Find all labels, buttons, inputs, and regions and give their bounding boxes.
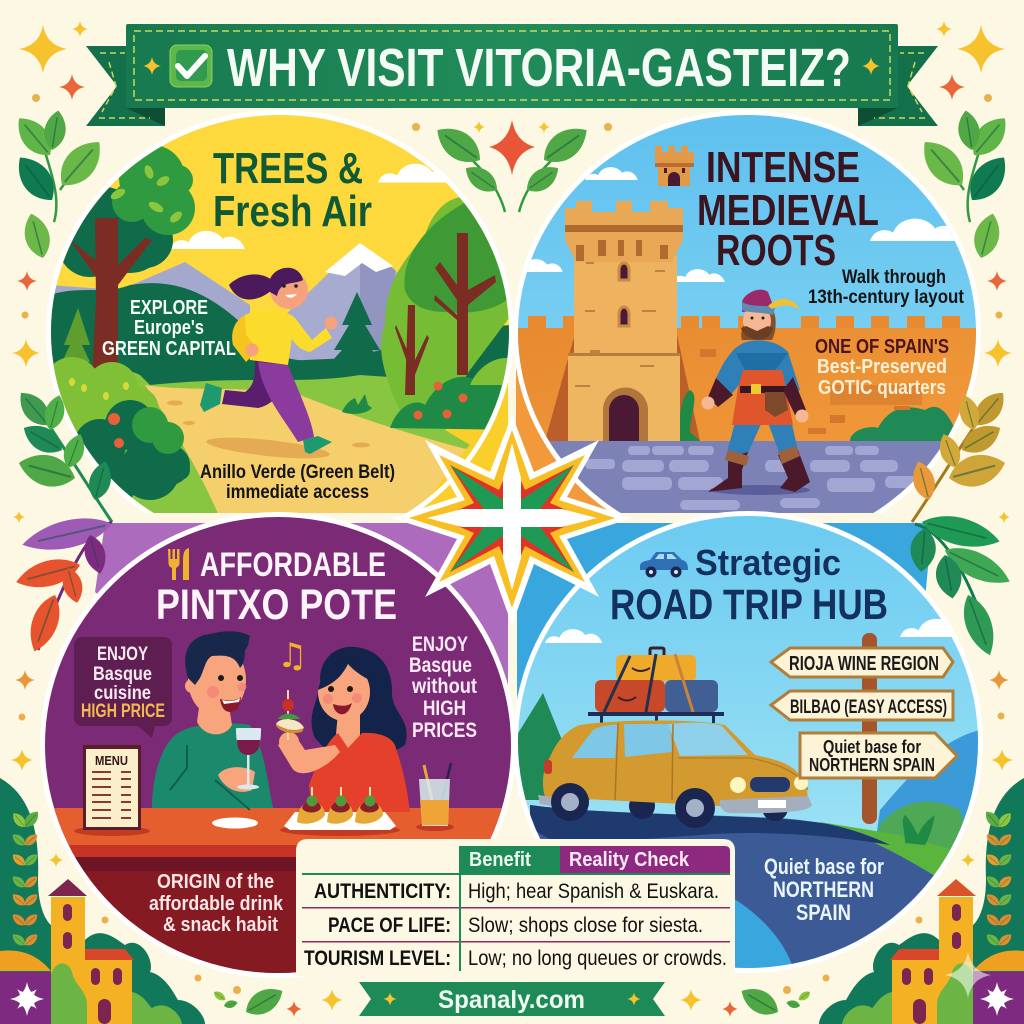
leaves: lower-right gold branch <box>909 386 1011 522</box>
text: origin of the habit <box>149 871 284 936</box>
ground <box>55 372 502 513</box>
table row: authenticity <box>314 880 719 903</box>
icon: fork and knife <box>168 548 189 580</box>
cobblestone street <box>549 441 941 513</box>
leaves: lower-left green branch <box>13 386 115 522</box>
table row: authenticity: AUTHENTICITY: <box>314 880 451 903</box>
comparison table <box>296 839 735 976</box>
text: explore Europe's green capital: GREEN CAPITAL <box>102 338 236 360</box>
castle tower <box>565 201 683 444</box>
menu card <box>74 745 150 836</box>
heading: affordable pintxo pote <box>156 546 397 629</box>
footer banner: Spanaly.com <box>359 982 665 1016</box>
text: best-preserved gothic quarters: GOTIC quarters <box>818 377 946 399</box>
pintxo plate <box>280 787 400 836</box>
footer banner: Spanaly.com: Spanaly.com <box>438 986 585 1014</box>
heading: strategic road trip hub: ROAD TRIP HUB <box>610 581 888 629</box>
text: Anillo Verde access: immediate access <box>226 482 369 503</box>
mountains <box>51 243 398 360</box>
icon: castle <box>655 146 694 186</box>
sign: Rioja wine region: RIOJA WINE REGION <box>789 653 939 675</box>
table row: authenticity: High; hear Spanish & Euskara. <box>468 880 719 903</box>
text: enjoy Basque without high prices: HIGH <box>423 697 466 720</box>
text: enjoy Basque without high prices: ENJOY <box>412 633 468 656</box>
leaves: centre-top branches <box>430 119 594 212</box>
text: explore Europe's green capital: EXPLORE <box>130 297 208 319</box>
title banner <box>86 24 938 126</box>
callout: high price <box>74 637 172 738</box>
corner wedge: yellow and orange behind upper panels <box>280 332 748 513</box>
woman with pintxo <box>276 647 410 812</box>
text: explore Europe's green capital <box>102 297 236 360</box>
heading: strategic road trip hub <box>610 542 888 629</box>
icon: music note: ♫ <box>277 636 307 676</box>
table row: tourism level: Low; no long queues or crowds. <box>468 947 727 970</box>
table row: pace of life: Slow; shops close for siesta. <box>468 914 703 937</box>
text: origin of the habit: & snack habit <box>163 914 278 936</box>
panel: intense medieval roots <box>510 110 981 554</box>
text: explore Europe's green capital: Europe's <box>134 317 204 339</box>
callout: high price: ENJOY <box>97 644 148 665</box>
white divider strip between upper and lower panels <box>125 513 905 524</box>
title text: WHY VISIT VITORIA-GASTEIZ? <box>227 38 851 98</box>
heading: intense medieval roots: MEDIEVAL <box>697 186 879 235</box>
icon: check mark <box>170 45 212 87</box>
heading: affordable pintxo pote: PINTXO POTE <box>156 581 397 629</box>
panel: trees and fresh air <box>46 110 514 513</box>
leaves: top-right branch <box>913 109 1015 261</box>
road <box>530 805 950 968</box>
text: walk through 13th-century layout: Walk through <box>842 267 946 288</box>
Basque star centrepiece <box>392 415 632 625</box>
man with wine <box>152 631 273 810</box>
text: best-preserved gothic quarters: Best-Preserved <box>817 356 947 378</box>
text: quiet base on road: Quiet base for <box>764 854 884 879</box>
text: enjoy Basque without high prices: PRICES <box>412 719 477 742</box>
text: origin of the habit: affordable drink <box>149 893 284 915</box>
text: best-preserved gothic quarters <box>815 336 949 399</box>
heading: strategic road trip hub: Strategic <box>695 542 841 583</box>
leaves: top-left branch <box>9 109 111 261</box>
heading: trees and fresh air: TREES & <box>213 144 363 193</box>
text: quiet base on road: SPAIN <box>796 900 851 925</box>
table row: pace of life: PACE OF LIFE: <box>328 914 451 937</box>
text: origin of the habit: ORIGIN of the <box>157 871 274 893</box>
text: Anillo Verde access: Anillo Verde (Green Belt) <box>200 462 395 483</box>
icon: orange star at top centre <box>489 120 535 175</box>
sign: Rioja wine region <box>771 648 953 677</box>
leaves: right green branch <box>909 509 1015 659</box>
text: quiet base on road <box>764 854 884 925</box>
leaves: left purple and red branch <box>13 511 115 656</box>
decoration: lower-left village corner <box>0 778 205 1024</box>
text: enjoy Basque without high prices: Basque <box>409 654 472 677</box>
sign: quiet base for northern Spain: NORTHERN SPAIN <box>809 755 935 775</box>
tree left <box>58 145 195 376</box>
sign: quiet base for northern Spain: Quiet base for <box>823 737 921 757</box>
heading: trees and fresh air <box>213 144 372 236</box>
table header <box>460 846 730 873</box>
drink glass <box>416 763 454 831</box>
text: best-preserved gothic quarters: ONE OF SPAIN'S <box>815 336 949 358</box>
text: Anillo Verde access <box>200 462 395 503</box>
text: quiet base on road: NORTHERN <box>773 877 874 902</box>
heading: intense medieval roots <box>697 143 879 275</box>
table row: tourism level: TOURISM LEVEL: <box>304 947 451 970</box>
text: walk through 13th-century layout: 13th-century layout <box>808 287 965 308</box>
panel: strategic road trip hub <box>513 511 990 975</box>
signpost <box>862 633 877 824</box>
callout: high price: HIGH PRICE <box>81 701 165 722</box>
text: enjoy Basque without high prices <box>409 633 477 742</box>
table header: Benefit <box>469 849 531 871</box>
right trees <box>381 197 515 410</box>
decoration: lower-right village corner <box>819 778 1024 1024</box>
path <box>145 385 468 513</box>
hills <box>517 693 980 880</box>
panel: affordable pintxo pote <box>40 512 516 981</box>
sign: quiet base for northern Spain <box>800 733 957 778</box>
heading: intense medieval roots: INTENSE <box>706 143 860 192</box>
castle wall <box>518 316 978 448</box>
heading: trees and fresh air: Fresh Air <box>213 187 372 236</box>
sign: Bilbao easy access: BILBAO (EASY ACCESS) <box>790 697 947 718</box>
car with luggage <box>538 648 812 828</box>
runner figure <box>200 268 338 454</box>
medieval walker figure <box>702 290 810 495</box>
text: enjoy Basque without high prices: without <box>411 675 477 698</box>
menu card: MENU <box>95 754 128 768</box>
callout: high price: cuisine <box>94 683 151 704</box>
callout: high price: Basque <box>93 664 152 685</box>
table row: pace of life <box>328 914 703 937</box>
table header: Reality Check <box>569 849 690 871</box>
heading: affordable pintxo pote: AFFORDABLE <box>200 546 386 584</box>
icon: blue car <box>640 552 688 578</box>
heading: intense medieval roots: ROOTS <box>716 226 836 275</box>
text: walk through 13th-century layout <box>808 267 965 308</box>
table row: tourism level <box>304 947 727 970</box>
sign: Bilbao easy access <box>771 691 953 720</box>
corner wedge: purple and blue behind lower panels <box>95 523 932 745</box>
bushes <box>54 357 508 500</box>
